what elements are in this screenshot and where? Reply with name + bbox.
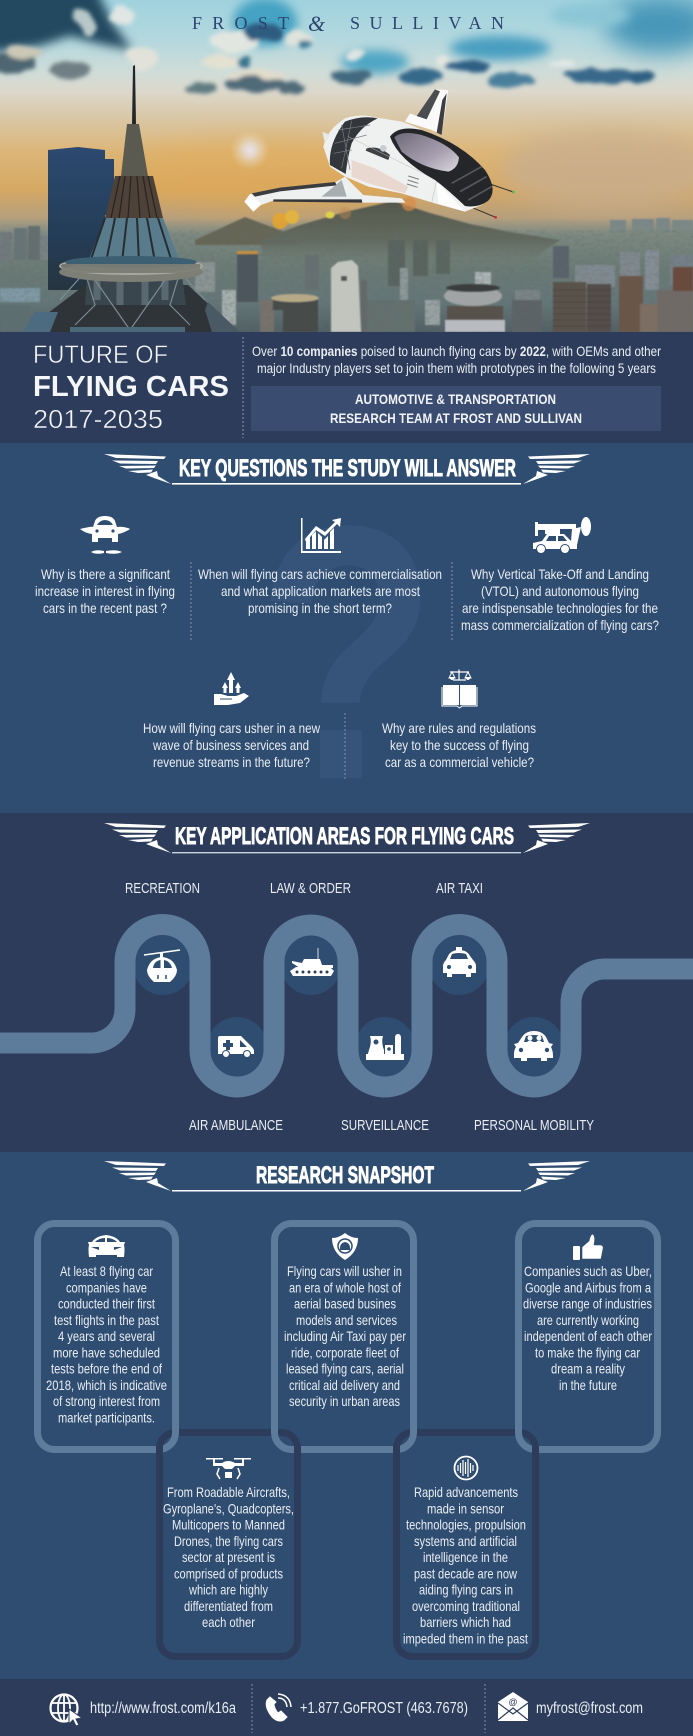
icon: taxi — [443, 947, 476, 977]
card text 5: past decade are now — [414, 1565, 518, 1581]
tower: glass building behind — [48, 147, 114, 290]
heading: application areas: KEY APPLICATION AREAS FOR FLYING CARS — [175, 823, 514, 850]
card text 3: are currently working — [537, 1312, 639, 1328]
interlock segments — [160, 1445, 536, 1456]
card text 4: each other — [202, 1614, 255, 1630]
left haze buildings — [0, 226, 48, 262]
card text 3: diverse range of industries — [523, 1296, 652, 1312]
card text 4: differentiated from — [184, 1598, 273, 1614]
icon: tank — [290, 948, 334, 976]
footer — [0, 1679, 693, 1736]
icon: thumbs up — [573, 1234, 603, 1260]
city texture — [0, 235, 693, 332]
mid-distance buildings — [0, 240, 693, 332]
panel: research snapshot — [0, 1152, 693, 1679]
card text 3: independent of each other — [524, 1328, 652, 1344]
far skyline — [610, 218, 693, 234]
icon: book and scales — [442, 670, 477, 708]
card text 3: in the future — [559, 1377, 617, 1393]
question 3: Why Vertical Take-Off and Landing — [471, 566, 649, 582]
card text 1: more have scheduled — [53, 1344, 160, 1360]
card text 2: aerial based busines — [294, 1296, 396, 1312]
heading: key questions — [104, 454, 590, 485]
card text 2: security in urban areas — [289, 1393, 400, 1409]
application labels: SURVEILLANCE — [341, 1118, 429, 1134]
heading: research snapshot: RESEARCH SNAPSHOT — [256, 1162, 434, 1189]
icon: drone — [206, 1458, 251, 1479]
heading: research snapshot — [104, 1161, 590, 1192]
card text 1: At least 8 flying car — [60, 1263, 153, 1279]
icon: globe with cursor — [50, 1694, 82, 1726]
title: 2017-2035 — [33, 404, 163, 434]
title band — [0, 332, 693, 443]
summary text: Over 10 companies poised to launch flying cars by 2022, with OEMs and other — [252, 343, 661, 359]
logo: SULLIVAN — [350, 13, 504, 33]
icon: flying car with rotor — [533, 517, 591, 554]
card text 5: barriers which had — [420, 1614, 511, 1630]
research team box: AUTOMOTIVE & TRANSPORTATION — [355, 391, 556, 407]
lower card frames — [160, 1432, 536, 1656]
card text 1 — [46, 1263, 167, 1425]
email: myfrost@frost.com — [536, 1700, 643, 1717]
card text 5 — [403, 1484, 528, 1646]
card text 4: comprised of products — [174, 1565, 283, 1581]
icon: hand with arrows — [214, 672, 249, 705]
flying car — [244, 89, 515, 219]
icon: personal car — [514, 1031, 553, 1061]
question 4: revenue streams in the future? — [153, 754, 310, 770]
icon: sensor circle — [454, 1456, 478, 1480]
title: FLYING CARS — [33, 371, 229, 403]
card text 2: models and services — [296, 1312, 397, 1328]
card text 1: 2018, which is indicative — [46, 1377, 167, 1393]
body — [323, 116, 492, 212]
logo — [192, 16, 504, 31]
question 4: How will flying cars usher in a new — [143, 720, 321, 736]
card text 2: an era of whole host of — [289, 1279, 401, 1295]
mountains — [194, 202, 560, 255]
card text 2: Flying cars will usher in — [287, 1263, 402, 1279]
card text 4: which are highly — [188, 1582, 268, 1598]
heading: application areas — [104, 823, 590, 853]
card text 4 — [163, 1484, 294, 1630]
panel: key application areas — [0, 813, 693, 1152]
question 1: increase in interest in flying — [35, 583, 175, 599]
question 4 — [143, 720, 321, 770]
icon backgrounds — [133, 935, 564, 1077]
card text 1: test flights in the past — [54, 1312, 159, 1328]
logo: & — [308, 11, 326, 36]
card text 4: Drones, the flying cars — [174, 1533, 283, 1549]
lens flares — [272, 197, 416, 229]
question 3: (VTOL) and autonomous flying — [481, 583, 639, 599]
sky — [0, 0, 693, 240]
question 5 — [382, 720, 536, 770]
card text 5: impeded them in the past — [403, 1630, 528, 1646]
question 1 — [35, 566, 175, 616]
icon: shield car — [332, 1233, 358, 1260]
card text 5: overcoming traditional — [412, 1598, 520, 1614]
card text 4: Gyroplane's, Quadcopters, — [163, 1500, 294, 1516]
icon: envelope — [498, 1692, 528, 1721]
application labels: RECREATION — [125, 881, 200, 897]
question 5: Why are rules and regulations — [382, 720, 536, 736]
title — [33, 341, 229, 434]
application labels: PERSONAL MOBILITY — [474, 1118, 594, 1134]
sun — [232, 134, 268, 168]
card text 1: tests before the end of — [51, 1361, 162, 1377]
card text 2: leased flying cars, aerial — [286, 1361, 404, 1377]
upper card frames — [38, 1224, 658, 1450]
tower: spire and cone — [23, 65, 240, 332]
tail fin — [405, 89, 448, 135]
question 2 — [198, 566, 442, 616]
winding road — [0, 924, 693, 1087]
card text 2: including Air Taxi pay per — [284, 1328, 406, 1344]
icon: envelope: @ — [508, 1697, 518, 1707]
question 5: car as a commercial vehicle? — [385, 754, 534, 770]
card text 2: critical aid delivery and — [289, 1377, 400, 1393]
card text 1: companies have — [66, 1279, 147, 1295]
icon: winged car — [80, 516, 130, 554]
card text 5: systems and artificial — [414, 1533, 517, 1549]
cockpit — [390, 128, 493, 207]
application labels: AIR TAXI — [436, 881, 483, 897]
question 3 — [461, 566, 659, 633]
card text 3: to make the flying car — [535, 1344, 640, 1360]
website: http://www.frost.com/k16a — [90, 1700, 236, 1717]
card text 5: intelligence in the — [423, 1549, 508, 1565]
card text 2 — [284, 1263, 406, 1409]
card text 2: ride, corporate fleet of — [291, 1344, 399, 1360]
icon: power plant — [366, 1034, 404, 1060]
phone number: +1.877.GoFROST (463.7678) — [300, 1700, 468, 1717]
card text 1: 4 years and several — [58, 1328, 155, 1344]
card text 1: market participants. — [58, 1409, 155, 1425]
card text 4: sector at present is — [182, 1549, 275, 1565]
dark cloud top left — [0, 0, 132, 54]
panels — [348, 137, 437, 203]
wing — [244, 177, 406, 212]
question 3: are indispensable technologies for the — [462, 600, 658, 616]
card text 3: Google and Airbus from a — [525, 1279, 651, 1295]
card text 3 — [523, 1263, 652, 1393]
title: FUTURE OF — [33, 341, 168, 369]
question 2: promising in the short term? — [248, 600, 392, 616]
card text 5: technologies, propulsion — [406, 1516, 526, 1532]
question 1: Why is there a significant — [41, 566, 170, 582]
research team box — [251, 386, 661, 431]
question 2: When will flying cars achieve commercialisation — [198, 566, 442, 582]
card text 5: made in sensor — [427, 1500, 504, 1516]
foreground buildings — [237, 251, 693, 332]
card text 4: From Roadable Aircrafts, — [167, 1484, 290, 1500]
card text 1: conducted their first — [58, 1296, 155, 1312]
application labels — [125, 881, 594, 1134]
question 4: wave of business services and — [152, 737, 309, 753]
card text 1: of strong interest from — [53, 1393, 160, 1409]
engine grid — [330, 117, 378, 174]
application labels: AIR AMBULANCE — [189, 1118, 283, 1134]
question 5: key to the success of flying — [390, 737, 529, 753]
card text 4: Multicopers to Manned — [172, 1516, 285, 1532]
logo: FROST — [192, 13, 289, 33]
summary text — [252, 343, 661, 376]
icon: sports car — [88, 1235, 125, 1257]
card text 5: aiding flying cars in — [419, 1582, 513, 1598]
panel: key questions — [0, 443, 693, 856]
city base — [0, 218, 693, 334]
hero photo: city skyline at sunset — [0, 0, 693, 334]
card text 3: Companies such as Uber, — [524, 1263, 652, 1279]
antennas — [470, 184, 515, 219]
application labels: LAW & ORDER — [270, 881, 351, 897]
clouds — [0, 5, 655, 94]
icon: helicopter cabin — [144, 950, 180, 982]
card text 5: Rapid advancements — [414, 1484, 518, 1500]
question mark watermark: ? — [256, 451, 438, 856]
question 2: and what application markets are most — [221, 583, 420, 599]
research team box: RESEARCH TEAM AT FROST AND SULLIVAN — [330, 410, 582, 426]
heading: key questions: KEY QUESTIONS THE STUDY WILL ANSWER — [179, 455, 516, 482]
icon: ambulance — [218, 1036, 254, 1058]
question 1: cars in the recent past ? — [43, 600, 167, 616]
icon: growth chart — [301, 518, 341, 553]
icon: phone — [266, 1694, 291, 1721]
card text 3: dream a reality — [551, 1361, 625, 1377]
